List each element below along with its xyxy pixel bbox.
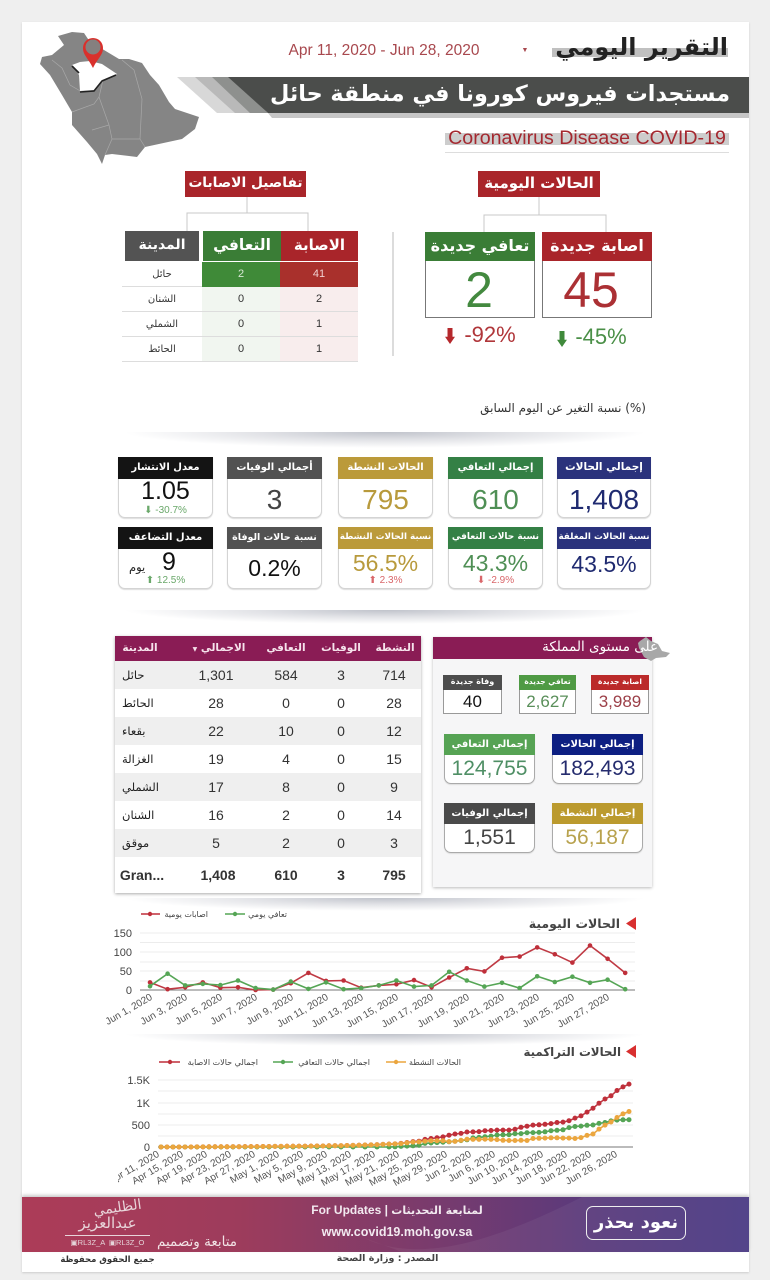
legend: daily xyxy=(141,910,287,919)
card: new deaths: وفاة جديدة xyxy=(451,677,494,686)
legend: cumulative: اجمالي حالات الاصابة xyxy=(188,1058,258,1067)
row: grand total: 795 xyxy=(382,867,406,883)
row: Ash Shamli xyxy=(115,773,421,801)
card: new deaths xyxy=(443,675,502,714)
card: total cases: 182,493 xyxy=(560,757,635,780)
row: Mawqaq: موقق xyxy=(122,836,149,850)
line chart: daily cases: Jun 5, 2020 xyxy=(174,992,225,1028)
card: total active: إجمالي النشطة xyxy=(560,808,635,819)
card: new recoveries xyxy=(519,675,576,714)
line chart: cumulative cases: May 17, 2020 xyxy=(320,1149,378,1189)
KPI: recovery rate: نسبة حالات التعافي xyxy=(452,532,539,542)
shadow band xyxy=(125,610,645,624)
line chart: cumulative cases: Apr 23, 2020 xyxy=(178,1149,234,1187)
panel header bar xyxy=(433,637,652,659)
line chart: cumulative cases: May 5, 2020 xyxy=(252,1149,306,1186)
line chart: daily cases: Jun 7, 2020 xyxy=(209,992,260,1028)
KPI: total cases: 1,408 xyxy=(569,484,639,515)
card: total cases xyxy=(552,734,643,784)
header: city: المدينة xyxy=(138,237,186,253)
KPI: spread rate: 1.05 xyxy=(141,477,190,505)
row: Mawqaq xyxy=(115,829,421,857)
row: Al Ghazalah: 19 xyxy=(208,751,224,767)
shadow band xyxy=(125,432,645,448)
value: 2 xyxy=(465,262,493,318)
line chart: cumulative cases: Apr 15, 2020 xyxy=(130,1149,186,1187)
row: Mawqaq: 2 xyxy=(282,835,290,851)
KPI: recovery rate xyxy=(448,527,543,589)
KPI: total cases: إجمالي الحالات xyxy=(565,461,643,473)
chart title: daily cases: الحالات اليومية xyxy=(529,916,620,931)
KPI: active cases xyxy=(338,457,433,518)
line chart: cumulative cases: Jun 22, 2020 xyxy=(538,1149,594,1188)
row: Hail: 3 xyxy=(337,667,345,683)
row: Al Shinan xyxy=(122,807,402,823)
row: Al Ghazalah: الغزالة xyxy=(122,752,153,766)
row: Ash Shamli: 1 xyxy=(316,318,322,330)
KPI: death rate xyxy=(227,527,322,589)
headline: مستجدات فيروس كورونا في منطقة حائل xyxy=(270,81,730,107)
KPI: total recovered xyxy=(448,457,543,518)
row: Al Ghazalah xyxy=(122,751,402,767)
card: new recoveries: تعافي جديدة xyxy=(524,677,571,686)
line chart: daily cases: Jun 9, 2020 xyxy=(245,992,296,1028)
connector: case details xyxy=(186,197,308,231)
line chart: cumulative cases: 500 xyxy=(132,1120,150,1132)
card: new cases: اصابة جديدة xyxy=(598,677,642,686)
line chart: cumulative cases: Apr 27, 2020 xyxy=(202,1149,258,1187)
card: total active: 56,187 xyxy=(565,826,630,849)
row: Al Hait: 0 xyxy=(282,695,290,711)
row: Ash Shamli: 9 xyxy=(390,779,398,795)
line chart: daily cases: Jun 1, 2020 xyxy=(104,992,155,1028)
row: Baqaa: 12 xyxy=(386,723,402,739)
signature: عبدالعزيز xyxy=(78,1214,137,1232)
table header xyxy=(115,636,421,661)
social handles: ▣RL3Z_A ▣RL3Z_O xyxy=(71,1238,144,1247)
card: total deaths xyxy=(444,803,535,853)
chart title: cumulative cases: الحالات التراكمية xyxy=(523,1045,621,1059)
row: Al Hait xyxy=(122,695,402,711)
line chart: cumulative cases: Apr 19, 2020 xyxy=(154,1149,210,1187)
legend: cumulative: اجمالي حالات التعافي xyxy=(298,1058,370,1067)
line chart: daily cases: Jun 11, 2020 xyxy=(276,992,331,1030)
title: daily report: التقرير اليومي xyxy=(555,33,728,61)
row: Baqaa: 0 xyxy=(337,723,345,739)
line chart: daily cases: 100 xyxy=(114,947,132,959)
line chart: cumulative cases: 1K xyxy=(137,1098,151,1110)
header: infected xyxy=(281,231,358,261)
line chart: cumulative cases: May 21, 2020 xyxy=(344,1149,402,1189)
line chart: cumulative cases: 1.5K xyxy=(127,1075,151,1087)
KPI: total deaths: 3 xyxy=(267,484,282,515)
row: Al Hait xyxy=(122,337,358,362)
row: Al Ghazalah: 15 xyxy=(386,751,402,767)
connector: daily cases xyxy=(484,197,606,232)
KPI: active cases: الحالات النشطة xyxy=(347,462,424,473)
row: Al Hait: الحائط xyxy=(148,344,176,355)
row: Hail: 2 xyxy=(238,268,244,280)
card: new recoveries: 2,627 xyxy=(526,692,569,711)
KPI: spread rate: ⬇ -30.7% xyxy=(144,505,187,516)
row: Ash Shamli: الشملي xyxy=(146,319,178,330)
panel: kingdom level xyxy=(433,637,652,887)
panel: new cases xyxy=(542,232,652,318)
line chart: cumulative cases: Jun 26, 2020 xyxy=(564,1149,620,1188)
row: Mawqaq: 0 xyxy=(337,835,345,851)
line chart: cumulative cases: 0 xyxy=(144,1142,150,1154)
KPI: closed cases rate: 43.5% xyxy=(571,551,637,577)
icon: Saudi map with Hail highlighted xyxy=(40,32,199,164)
row: Ash Shamli: الشملي xyxy=(122,780,159,794)
row: Hail: 584 xyxy=(274,667,298,683)
row: Al Ghazalah: 0 xyxy=(337,751,345,767)
card: total recovered xyxy=(444,734,535,784)
header xyxy=(425,232,535,261)
table header: النشطة xyxy=(375,642,415,654)
KPI: active cases: 795 xyxy=(362,484,409,515)
KPI: death rate: 0.2% xyxy=(248,555,301,581)
row: Hail xyxy=(122,262,358,287)
line chart: cumulative cases: Jun 6, 2020 xyxy=(447,1149,498,1185)
row: Al Hait: 28 xyxy=(386,695,402,711)
row: grand total: Gran... xyxy=(120,867,164,883)
row: Al Hait: 0 xyxy=(337,695,345,711)
note: percent change from previous day: (%) نسبة التغير عن اليوم السابق xyxy=(480,401,646,415)
table header: المدينة xyxy=(122,642,158,654)
row: Mawqaq: 3 xyxy=(390,835,398,851)
KPI: spread rate: معدل الانتشار xyxy=(131,462,200,473)
row: Al Hait: 0 xyxy=(238,343,244,355)
row: Baqaa: بقعاء xyxy=(122,724,145,738)
row: Al Hait: 1 xyxy=(316,343,322,355)
updates text: For Updates | لمتابعة التحديثات xyxy=(311,1203,483,1217)
line chart: daily cases: 50 xyxy=(120,966,132,978)
heading: daily cases xyxy=(478,171,600,197)
line chart: cumulative cases: May 1, 2020 xyxy=(228,1149,282,1186)
slogan badge: نعود بحذر xyxy=(594,1212,678,1233)
date dropdown caret: ▼ xyxy=(522,47,528,54)
row: Al Shinan: 2 xyxy=(282,807,290,823)
line chart: daily cases: Jun 27, 2020 xyxy=(556,992,612,1030)
divider xyxy=(392,232,394,356)
row: Al Shinan xyxy=(122,287,358,312)
shadow band xyxy=(125,898,645,911)
heading: case details xyxy=(185,171,306,197)
KPI: closed cases rate: نسبة الحالات المغلقة xyxy=(558,532,650,542)
header xyxy=(542,232,652,261)
row: Baqaa: 10 xyxy=(278,723,294,739)
row: Al Shinan: 2 xyxy=(316,293,322,305)
row: Ash Shamli: 8 xyxy=(282,779,290,795)
card: total recovered: 124,755 xyxy=(452,757,527,780)
row: Hail: 41 xyxy=(313,268,325,280)
row: Mawqaq: 5 xyxy=(212,835,220,851)
KPI: closed cases rate xyxy=(557,527,651,589)
legend: cumulative: الحالات النشطة xyxy=(409,1058,461,1067)
card: total active xyxy=(552,803,643,853)
slogan badge xyxy=(586,1206,686,1240)
line chart: daily cases: Jun 17, 2020 xyxy=(380,992,436,1030)
header: infected: الاصابة xyxy=(294,236,345,254)
signature: الظليمي xyxy=(92,1197,143,1219)
KPI: doubling rate: ⬆ 12.5% xyxy=(146,575,185,586)
row: Hail: 1,301 xyxy=(198,667,234,683)
title band xyxy=(177,77,749,118)
KPI: doubling rate: معدل التضاعف xyxy=(129,532,202,543)
table header: الوفيات xyxy=(321,642,361,654)
table: cities xyxy=(115,636,421,893)
KPI: total cases xyxy=(557,457,651,518)
legend: cumulative xyxy=(159,1058,461,1067)
row: Ash Shamli: 17 xyxy=(208,779,224,795)
line chart: cumulative cases: Jun 18, 2020 xyxy=(514,1149,570,1188)
header: recovered: التعافي xyxy=(213,236,271,254)
line chart: cumulative cases xyxy=(118,1058,633,1189)
KPI: doubling rate: يوم xyxy=(129,560,145,574)
header: city xyxy=(125,231,199,261)
line chart: daily cases: Jun 13, 2020 xyxy=(310,992,366,1030)
line chart: daily cases: Jun 3, 2020 xyxy=(139,992,190,1028)
card: total deaths: إجمالي الوفيات xyxy=(451,808,528,819)
row: grand total: 3 xyxy=(337,867,345,883)
website: www.covid19.moh.gov.sa xyxy=(322,1225,472,1239)
card: new cases xyxy=(591,675,649,714)
row: grand total xyxy=(120,867,406,883)
line chart: daily cases: 150 xyxy=(114,928,132,940)
header: اصابة جديدة xyxy=(550,236,644,255)
table header: ▼ الاجمالي xyxy=(193,642,245,654)
line chart: cumulative cases: Jun 2, 2020 xyxy=(423,1149,474,1185)
rights text: جميع الحقوق محفوظة xyxy=(60,1255,155,1265)
KPI: active rate: 56.5% xyxy=(353,550,418,576)
row: Al Ghazalah: 4 xyxy=(282,751,290,767)
heading: case details: تفاصيل الاصابات xyxy=(188,175,303,191)
row: Baqaa xyxy=(115,717,421,745)
row: Al Hait: 28 xyxy=(208,695,224,711)
panel heading: kingdom level: على مستوى المملكة xyxy=(542,639,658,655)
panel: new recoveries xyxy=(425,232,535,318)
icon: small Saudi map xyxy=(638,637,670,661)
row: Hail: 714 xyxy=(382,667,406,683)
card: new cases: 3,989 xyxy=(599,692,641,711)
row: Ash Shamli xyxy=(122,312,358,337)
footer banner xyxy=(22,1197,749,1252)
subtitle: Coronavirus Disease COVID-19: Coronavirus Disease COVID-19 xyxy=(448,127,726,149)
KPI: total deaths xyxy=(227,457,322,518)
footer swoosh xyxy=(370,1197,749,1252)
line chart: cumulative cases: May 9, 2020 xyxy=(276,1149,330,1186)
header: تعافي جديدة xyxy=(431,236,529,255)
KPI: active rate: ⬆ 2.3% xyxy=(369,575,402,586)
row: Ash Shamli: 0 xyxy=(337,779,345,795)
heading: daily cases: الحالات اليومية xyxy=(484,174,594,192)
line chart: cumulative cases: Jun 14, 2020 xyxy=(490,1149,546,1188)
change: recoveries -92%: -92% xyxy=(464,322,516,347)
small cards xyxy=(443,675,649,854)
card: total cases: إجمالي الحالات xyxy=(560,739,635,750)
signature xyxy=(65,1197,150,1236)
row: grand total: 1,408 xyxy=(200,867,236,883)
table: case details xyxy=(122,231,358,362)
source text: المصدر : وزارة الصحة xyxy=(337,1253,438,1264)
row: Al Shinan: 0 xyxy=(337,807,345,823)
row: Al Shinan: 0 xyxy=(238,293,244,305)
line chart: daily cases: Jun 25, 2020 xyxy=(521,992,577,1030)
KPI: total deaths: أجمالي الوفيات xyxy=(236,462,313,473)
row: Ash Shamli: 0 xyxy=(238,318,244,330)
line chart: daily cases: Jun 21, 2020 xyxy=(451,992,507,1030)
KPI: doubling rate: 9 xyxy=(162,548,176,576)
card: total recovered: إجمالي التعافي xyxy=(452,739,527,750)
line chart: daily cases xyxy=(104,910,635,1030)
KPI: total recovered: إجمالي التعافي xyxy=(458,462,533,473)
KPI: spread rate xyxy=(118,457,213,518)
line chart: daily cases: Jun 19, 2020 xyxy=(416,992,472,1030)
cell shading xyxy=(202,286,280,361)
header: recovered xyxy=(203,231,281,261)
KPI: total recovered: 610 xyxy=(472,484,519,515)
KPI: active rate xyxy=(338,527,433,589)
row: Hail: حائل xyxy=(152,269,172,280)
shadow band xyxy=(125,1034,645,1046)
line chart: cumulative cases: May 29, 2020 xyxy=(392,1149,450,1189)
KPI: recovery rate: 43.3% xyxy=(463,550,528,576)
row: Al Hait: الحائط xyxy=(122,696,154,710)
row: Al Shinan: الشنان xyxy=(122,808,154,822)
KPI: death rate: نسبة حالات الوفاة xyxy=(232,532,317,543)
row: Baqaa: 22 xyxy=(208,723,224,739)
design credit: متابعة وتصميم xyxy=(157,1234,237,1250)
line chart: daily cases: Jun 15, 2020 xyxy=(345,992,401,1030)
row: Al Shinan: 16 xyxy=(208,807,224,823)
line chart: cumulative cases: May 13, 2020 xyxy=(296,1149,354,1189)
KPI: doubling rate xyxy=(118,527,213,589)
line chart: cumulative cases: May 25, 2020 xyxy=(368,1149,426,1189)
row: Hail: حائل xyxy=(122,668,145,682)
table header: التعافي xyxy=(266,642,306,654)
legend: daily: تعافي يومي xyxy=(248,910,287,919)
line chart: daily cases: 0 xyxy=(126,985,132,997)
row: Hail xyxy=(115,661,421,689)
row: Al Shinan: الشنان xyxy=(148,294,176,305)
row: Al Shinan: 14 xyxy=(386,807,402,823)
KPI: recovery rate: ⬇ -2.9% xyxy=(477,575,514,586)
row: grand total: 610 xyxy=(274,867,298,883)
change: cases -45%: -45% xyxy=(575,324,627,349)
value: 45 xyxy=(563,262,619,318)
KPI: active rate: نسبة الحالات النشطة xyxy=(340,532,431,542)
line chart: daily cases: Jun 23, 2020 xyxy=(486,992,542,1030)
line chart: cumulative cases: Jun 10, 2020 xyxy=(466,1149,522,1188)
legend: daily: اصابات يومية xyxy=(164,910,208,919)
date range: Apr 11, 2020 - Jun 28, 2020 xyxy=(288,42,480,59)
card: total deaths: 1,551 xyxy=(463,826,516,849)
card: new deaths: 40 xyxy=(463,692,482,711)
